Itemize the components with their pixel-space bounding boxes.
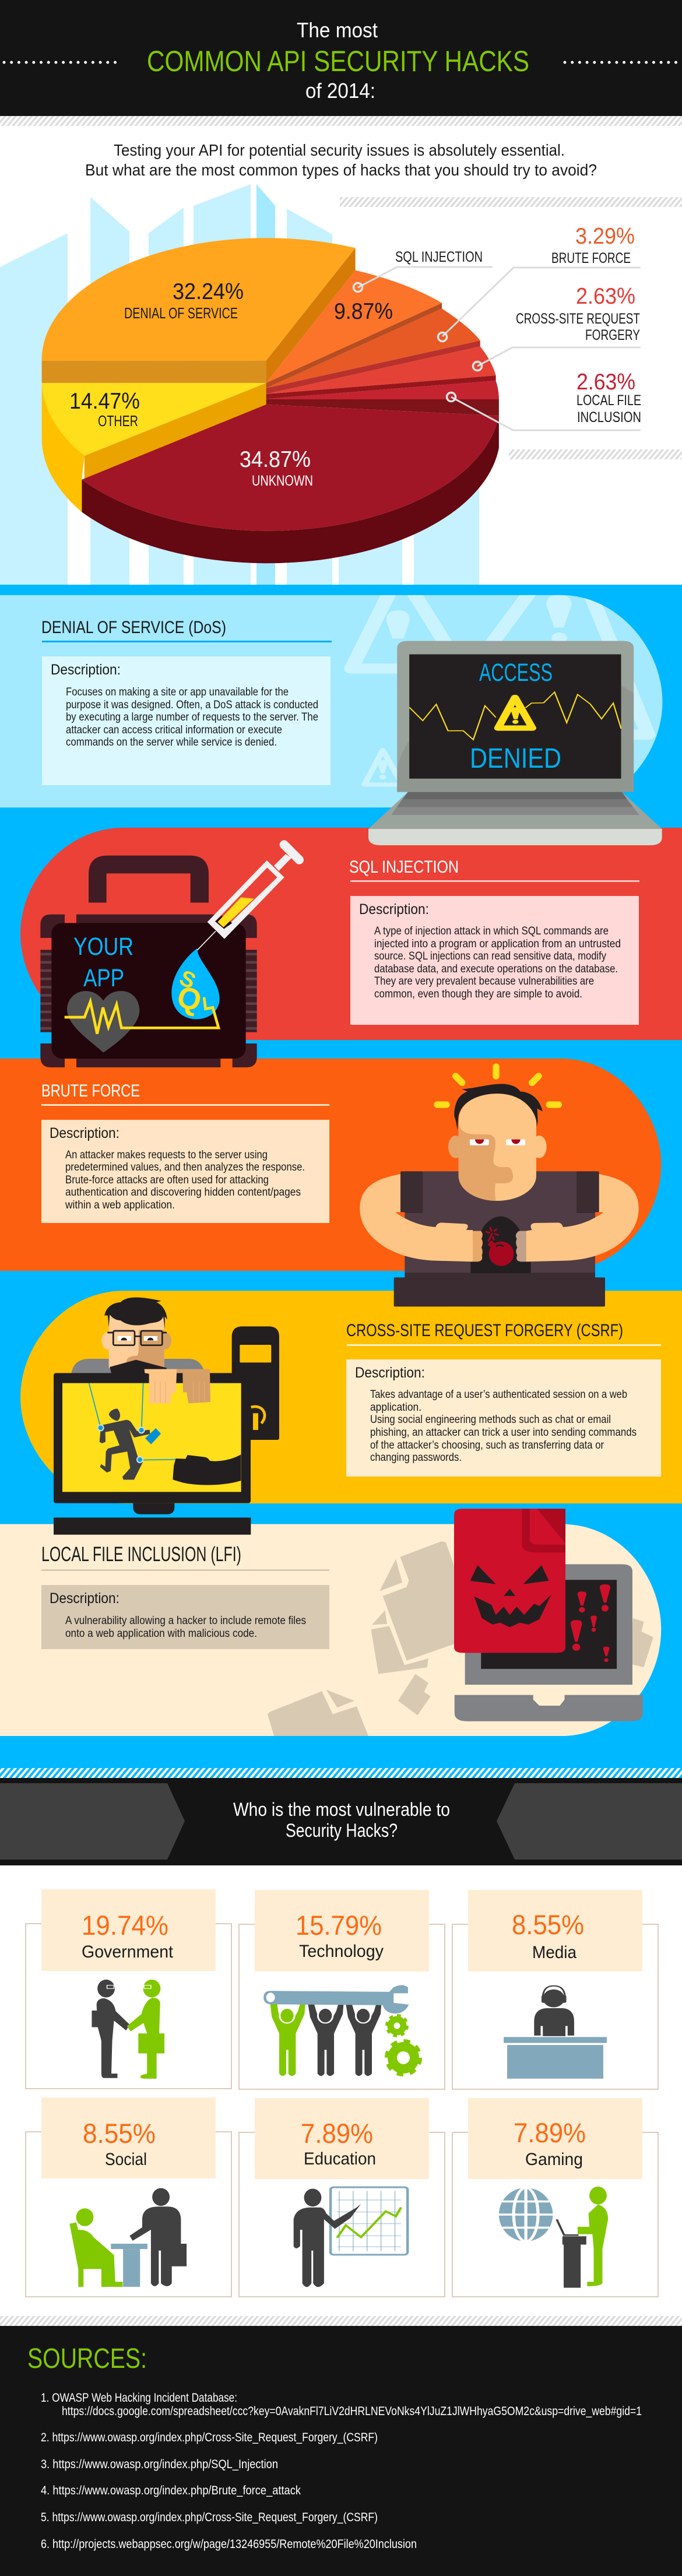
callout: brute force: [551, 224, 635, 266]
description box: cross-site request forgery: Using social engineering methods such as chat or email: [370, 1414, 611, 1426]
description box: cross-site request forgery: Takes advantage of a user’s authenticated session on a web: [370, 1389, 627, 1401]
icon: gears: [386, 2015, 420, 2075]
sources list: 4. https://www.owasp.org/index.php/Brute_force_attack: [41, 2484, 301, 2497]
illustration: brute force man with bomb: [360, 1067, 639, 1306]
description box: brute force: authentication and discovering hidden content/pages: [65, 1186, 301, 1199]
heading: sql injection: [349, 858, 639, 882]
description box: cross-site request forgery: of the attacker’s choosing, such as transferring data or: [370, 1439, 604, 1452]
header band: [0, 0, 682, 126]
icon: news presenter: [504, 1986, 607, 2079]
section banner: [0, 1778, 682, 1865]
description box: sql injection: database data, and execute operations on the database.: [374, 963, 618, 975]
pie label: unknown: UNKNOWN: [252, 473, 313, 489]
description box: cross-site request forgery: changing passwords.: [370, 1452, 462, 1464]
card: education: Education: [304, 2149, 376, 2169]
card: government: 19.74%: [82, 1910, 168, 1941]
pie label: unknown: [240, 447, 313, 489]
title: COMMON API SECURITY HACKS: [147, 45, 529, 78]
callout: cross-site request forgery: CROSS-SITE REQUEST: [516, 311, 640, 327]
callout: sql injection: SQL INJECTION: [395, 249, 483, 265]
panel: denial of service: [0, 595, 662, 808]
intro text: [85, 141, 597, 179]
card: social: [26, 2097, 231, 2297]
panel: local file inclusion: [0, 1524, 661, 1736]
icon: scattered files: [268, 1541, 653, 1736]
description box: sql injection: Description:: [359, 901, 429, 918]
sources list: 3. https://www.owasp.org/index.php/SQL_Injection: [41, 2458, 278, 2471]
leader lines: [353, 267, 641, 430]
description box: brute force: Description:: [50, 1125, 119, 1141]
description box: brute force: An attacker makes requests to the server using: [65, 1149, 268, 1161]
pie label: denial of service: 32.24%: [173, 279, 244, 304]
illustration: your app case with syringe: [40, 845, 299, 1067]
illustration: your app case with syringe: S: [175, 966, 199, 994]
pie label: sql value: 9.87%: [334, 299, 393, 324]
blue background: [0, 585, 682, 1768]
description box: sql injection: common, even though they are simple to avoid.: [374, 988, 582, 1000]
card: media: Media: [532, 1943, 576, 1962]
intro text: Testing your API for potential security issues is absolutely essential.: [114, 141, 565, 159]
callout: local file inclusion: [576, 370, 641, 426]
blue-white hatch band: [0, 1768, 682, 1778]
description box: sql injection: source. SQL injections can read sensitive data, modify: [374, 950, 606, 962]
panel: sql injection: [20, 828, 682, 1040]
description box: cross-site request forgery: phishing, an attacker can trick a user into sending commands: [370, 1426, 637, 1439]
grey hatch band: [0, 2316, 682, 2326]
description box: brute force: Brute-force attacks are often used for attacking: [65, 1174, 269, 1186]
sources list: 2. https://www.owasp.org/index.php/Cross-Site_Request_Forgery_(CSRF): [41, 2431, 378, 2444]
description box: cross-site request forgery: application.: [370, 1401, 421, 1414]
sources heading: SOURCES:: [27, 2343, 147, 2374]
intro text: But what are the most common types of hacks that you should try to avoid?: [85, 161, 597, 179]
description box: local file inclusion: Description:: [50, 1590, 119, 1607]
card: education: 7.89%: [301, 2118, 373, 2149]
callout: cross-site request forgery: 2.63%: [576, 284, 635, 309]
icon: meeting at table: [69, 2188, 187, 2287]
pie label: other: [69, 389, 140, 430]
card: technology: Technology: [299, 1942, 384, 1961]
banner heading: [233, 1799, 450, 1841]
heading: denial of service: [41, 618, 332, 642]
sources list: 6. http://projects.webappsec.org/w/page/13246955/Remote%20File%20Inclusion: [41, 2538, 417, 2551]
description box: cross-site request forgery: [346, 1359, 661, 1477]
illustration: hacker puppeteering a user on a computer: [54, 1298, 279, 1535]
illustration: malicious file on laptop: [454, 1509, 643, 1721]
illustration: your app case with syringe: YOUR: [73, 933, 133, 961]
callout: cross-site request forgery: [516, 284, 640, 343]
card: gaming: Gaming: [525, 2150, 583, 2169]
icon: player with globe: [499, 2187, 608, 2287]
title: [147, 18, 529, 103]
callout: brute force: 3.29%: [575, 224, 635, 249]
illustration: laptop access denied: ACCESS: [479, 659, 553, 687]
heading: brute force: [41, 1081, 329, 1106]
icon: handshake: [92, 1980, 164, 2079]
description box: cross-site request forgery: Description:: [355, 1365, 425, 1381]
sources list: [41, 2391, 642, 2551]
sources list: 1. OWASP Web Hacking Incident Database:: [41, 2391, 237, 2405]
description box: denial of service: purpose it was designed. Often, a DoS attack is conducted: [66, 699, 318, 711]
card: technology: [239, 1890, 445, 2089]
heading: denial of service: DENIAL OF SERVICE (DoS): [41, 618, 226, 637]
description box: local file inclusion: [41, 1585, 329, 1649]
card: media: [452, 1890, 658, 2089]
title: The most: [297, 18, 378, 42]
card: gaming: 7.89%: [514, 2117, 586, 2148]
pie label: other: OTHER: [98, 412, 138, 430]
description box: denial of service: attacker can access critical information or execute: [66, 724, 282, 736]
heading: local file inclusion: LOCAL FILE INCLUSION (LFI): [41, 1543, 241, 1566]
description box: sql injection: injected into a program or application from an untrusted: [374, 938, 621, 950]
callout: local file inclusion: LOCAL FILE: [576, 392, 641, 409]
description box: brute force: within a web application.: [65, 1199, 175, 1211]
callout: local file inclusion: INCLUSION: [577, 409, 641, 426]
heading: sql injection: SQL INJECTION: [349, 858, 459, 877]
sources list: 5. https://www.owasp.org/index.php/Cross-Site_Request_Forgery_(CSRF): [41, 2511, 378, 2524]
pie label: other: 14.47%: [69, 389, 140, 414]
description box: local file inclusion: onto a web application with malicious code.: [65, 1628, 257, 1640]
description box: brute force: predetermined values, and then analyzes the response.: [65, 1161, 305, 1173]
pie label: unknown: 34.87%: [240, 447, 311, 472]
description box: denial of service: by executing a large number of requests to the server. The: [66, 711, 318, 723]
description box: denial of service: Description:: [51, 662, 121, 678]
callout: cross-site request forgery: FORGERY: [585, 327, 640, 343]
description box: local file inclusion: A vulnerability allowing a hacker to include remote files: [65, 1615, 306, 1627]
pie label: denial of service: DENIAL OF SERVICE: [124, 304, 238, 322]
description box: sql injection: They are very prevalent because vulnerabilities are: [374, 975, 594, 987]
sources section: [0, 2326, 682, 2576]
card: government: Government: [82, 1942, 174, 1962]
card: social: 8.55%: [83, 2118, 156, 2149]
card: technology: 15.79%: [296, 1910, 382, 1941]
pie label: denial of service: [124, 279, 244, 322]
banner heading: Security Hacks?: [286, 1820, 398, 1841]
title: of 2014:: [305, 79, 375, 103]
callout: brute force: BRUTE FORCE: [551, 250, 631, 266]
card: social: Social: [105, 2150, 147, 2169]
description box: brute force: [41, 1120, 329, 1223]
panel: brute force: [0, 1059, 661, 1271]
description box: denial of service: Focuses on making a site or app unavailable for the: [66, 686, 289, 698]
illustration: laptop access denied: DENIED: [470, 743, 561, 774]
description box: sql injection: [350, 896, 639, 1025]
card: media: 8.55%: [512, 1909, 584, 1940]
card: government: [26, 1889, 231, 2089]
description box: denial of service: [42, 656, 331, 785]
background skyline: [0, 184, 479, 585]
description box: denial of service: commands on the server while service is denied.: [66, 736, 277, 748]
heading: brute force: BRUTE FORCE: [41, 1081, 140, 1101]
pie chart: [42, 238, 499, 563]
icon: team lifting wrench: [263, 1985, 409, 2076]
panel: cross-site request forgery: [20, 1291, 682, 1503]
callout: local file inclusion: 2.63%: [576, 370, 635, 395]
banner heading: Who is the most vulnerable to: [233, 1799, 450, 1820]
icon: teacher with chart: [294, 2187, 407, 2287]
description box: sql injection: A type of injection attack in which SQL commands are: [374, 925, 609, 937]
card: gaming: [452, 2098, 658, 2297]
illustration: your app case with syringe: APP: [83, 964, 124, 992]
illustration: laptop access denied: [368, 641, 662, 845]
card: education: [239, 2098, 445, 2297]
illustration: your app case with syringe: Q: [174, 980, 205, 1018]
